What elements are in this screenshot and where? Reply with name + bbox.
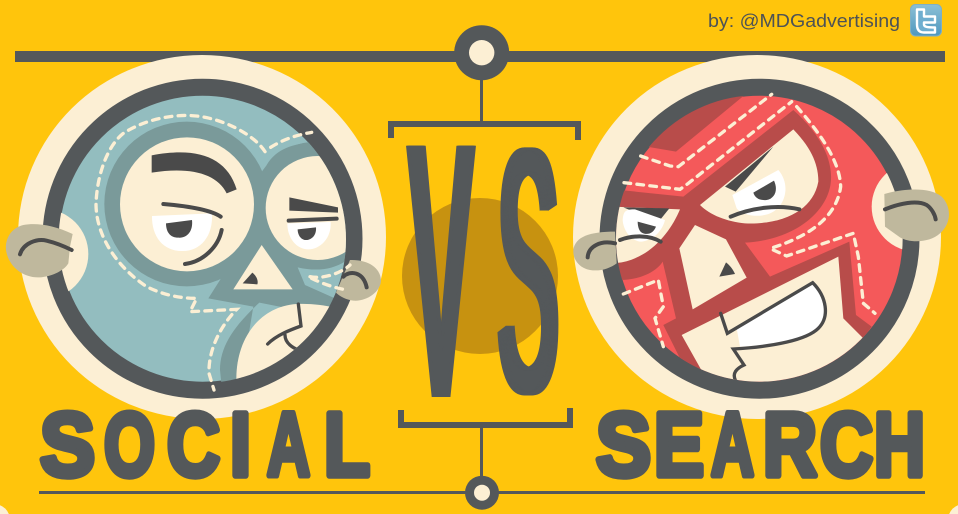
vertical stem top <box>480 78 483 122</box>
heading: social: I <box>230 396 251 496</box>
outer cream circle left <box>18 55 386 419</box>
red mask face <box>573 92 949 382</box>
icon: twitter <box>910 4 942 36</box>
outer cream circle right <box>573 55 941 419</box>
bottom connector bar <box>39 491 925 494</box>
top connector node <box>454 25 509 80</box>
heading: search: R <box>763 396 817 496</box>
panel: search wrestler <box>573 55 958 419</box>
blue mask face <box>0 115 382 390</box>
heading: social: A <box>267 396 310 496</box>
panel: social wrestler <box>0 55 386 419</box>
heading: social: S <box>40 396 95 496</box>
heading: social: C <box>167 396 220 496</box>
bottom connector node <box>465 476 499 510</box>
heading: search: E <box>654 396 704 496</box>
dark ring right <box>608 87 911 390</box>
heading: search: A <box>711 396 754 496</box>
heading: search: H <box>874 396 925 496</box>
heading: social: L <box>324 396 370 496</box>
vertical stem bottom <box>480 428 483 478</box>
credit text: by: @MDGadvertising <box>708 10 900 31</box>
heading: search: C <box>820 396 873 496</box>
dark ring left <box>51 87 354 390</box>
top connector bar <box>15 51 945 62</box>
center brown circle <box>402 198 558 354</box>
VS title: V <box>408 70 474 470</box>
top bracket <box>388 121 581 140</box>
heading: social: O <box>104 396 155 496</box>
heading: search: S <box>596 396 651 496</box>
infographic header: S <box>498 78 558 464</box>
bottom bracket <box>398 408 573 428</box>
